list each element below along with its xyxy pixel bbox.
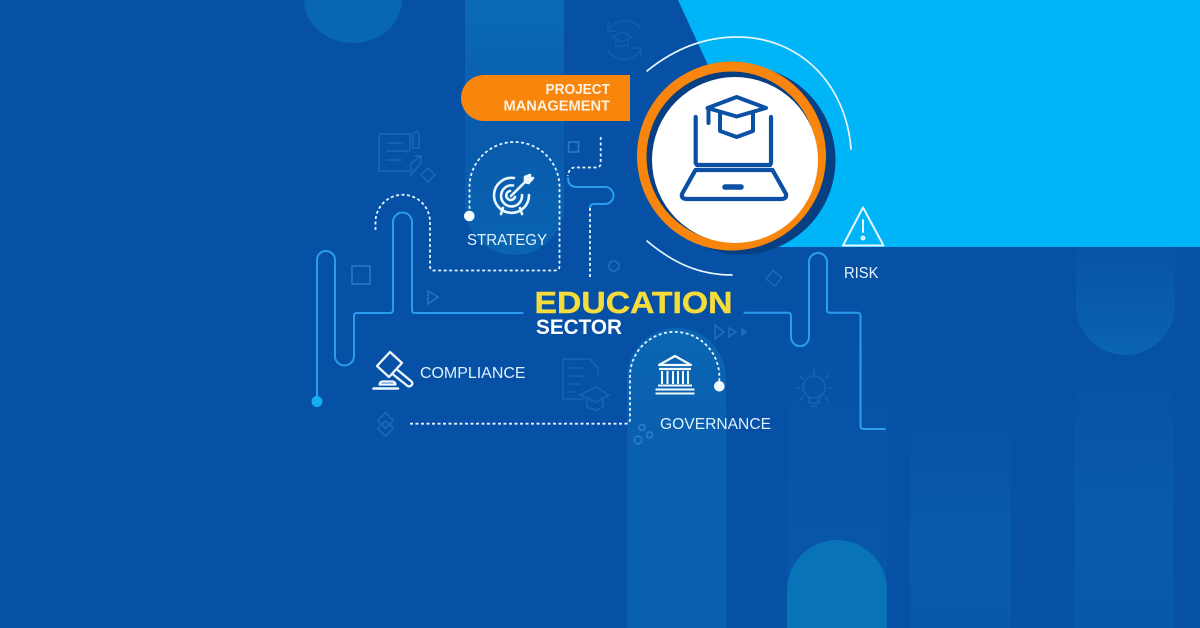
orange label: project management: PROJECT bbox=[546, 82, 610, 98]
icon: triple play arrows bbox=[715, 325, 736, 339]
icon: graduation refresh bbox=[608, 21, 641, 59]
icon: small square bbox=[568, 142, 578, 152]
left solid line bbox=[317, 212, 522, 401]
icon: small circle bbox=[609, 261, 619, 271]
decorative arcs around badge bbox=[647, 37, 851, 275]
icon: graduation cap bbox=[708, 97, 766, 137]
node: governance dot bbox=[714, 381, 725, 392]
icon: play triangle bbox=[428, 291, 438, 304]
label: compliance: COMPLIANCE bbox=[420, 365, 526, 382]
orange label: project management bbox=[461, 75, 630, 121]
icon: document with graduation cap bbox=[563, 359, 609, 410]
icon: target with arrow bbox=[494, 175, 533, 214]
light blue corner panel bbox=[678, 0, 1200, 247]
heading: education sector: SECTOR bbox=[536, 316, 622, 339]
icon: tilted diamond bbox=[766, 271, 782, 286]
heading: education sector: EDUCATION bbox=[534, 285, 732, 320]
icon: laptop bbox=[682, 117, 786, 199]
icon: small diamond bbox=[421, 168, 435, 182]
upper right dashed path bbox=[568, 137, 601, 176]
faint decorative icons bbox=[352, 21, 833, 444]
icon: warning triangle bbox=[843, 208, 884, 246]
dashed connector lines bbox=[376, 137, 719, 424]
label: risk: RISK bbox=[844, 265, 879, 282]
strategy dashed path bbox=[376, 142, 560, 270]
upper short solid line bbox=[568, 178, 614, 208]
heading: education sector bbox=[534, 285, 732, 339]
node: strategy dot bbox=[464, 211, 475, 221]
icon: open square bbox=[352, 266, 370, 284]
label: governance: GOVERNANCE bbox=[660, 416, 771, 433]
icon: document with pen bbox=[379, 131, 421, 175]
solid connector lines bbox=[317, 178, 885, 429]
icon: small bubbles bbox=[634, 424, 652, 444]
background stripes and pills bbox=[277, 0, 1175, 628]
left end dot bbox=[312, 396, 322, 407]
label: strategy: STRATEGY bbox=[467, 232, 547, 249]
badge: laptop with graduation cap bbox=[637, 62, 836, 254]
icon: stacked diamonds bbox=[378, 413, 393, 436]
orange label: project management: MANAGEMENT bbox=[504, 99, 610, 115]
governance dashed path bbox=[410, 332, 719, 424]
central vertical dashed path bbox=[589, 208, 591, 278]
icon: institution building bbox=[656, 356, 694, 394]
icon: light bulb bbox=[795, 369, 833, 406]
right solid line bbox=[744, 253, 885, 429]
icon: gavel bbox=[374, 352, 412, 388]
